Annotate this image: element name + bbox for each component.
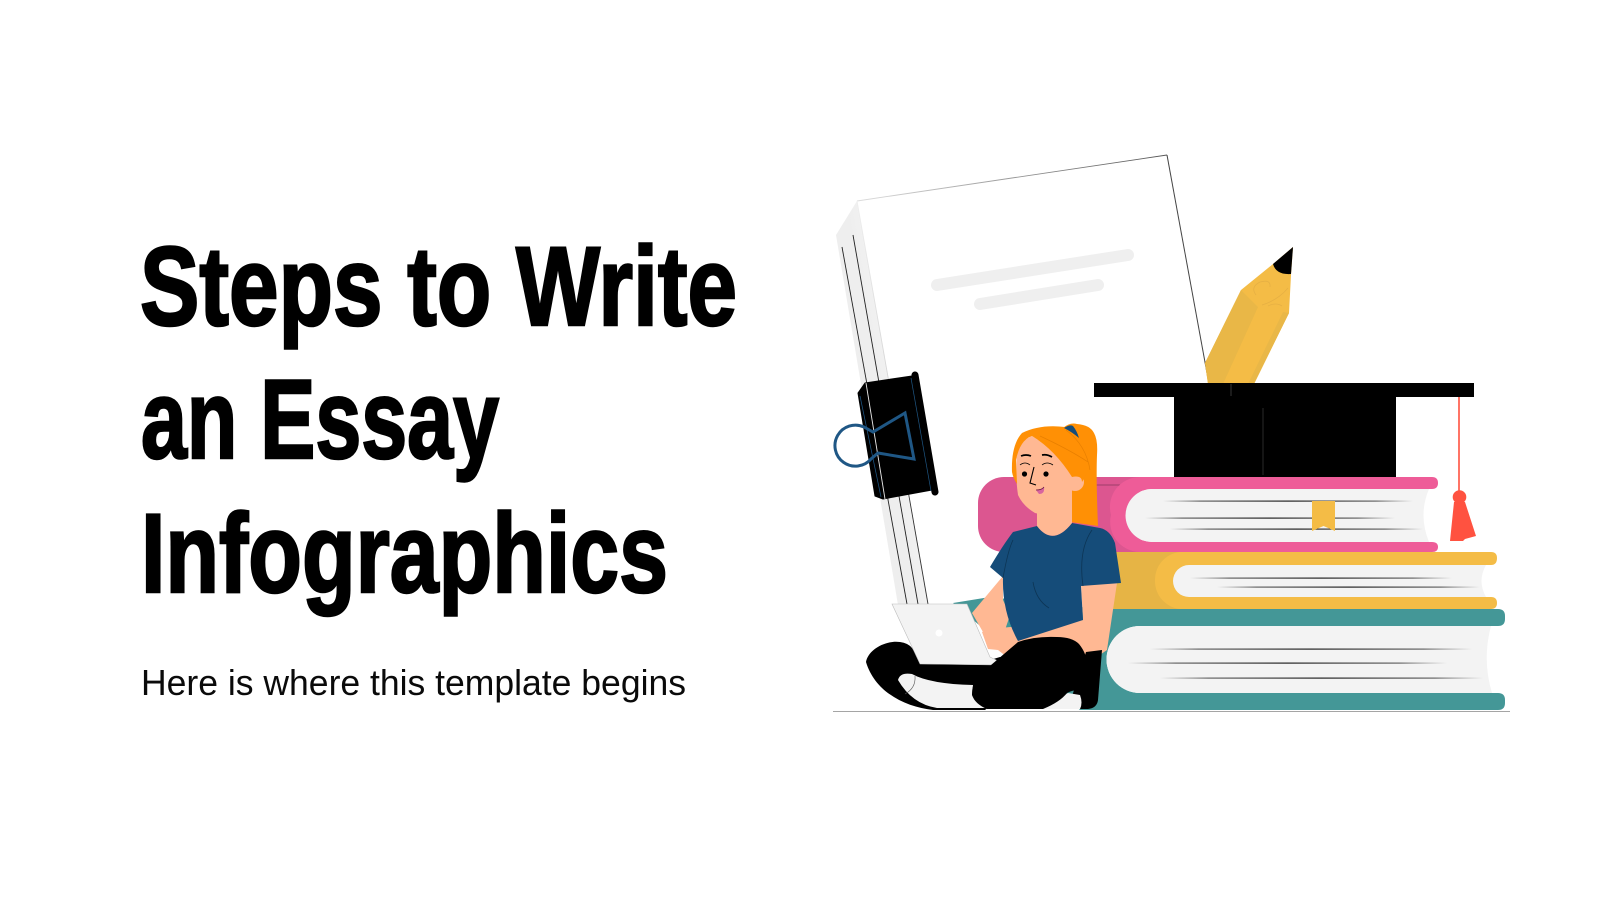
neck (1037, 490, 1072, 536)
left leg (866, 642, 1010, 710)
illustration (833, 155, 1510, 712)
title (140, 224, 737, 616)
ground line (833, 710, 1510, 712)
graduation cap (1094, 383, 1476, 541)
title: an Essay (141, 357, 499, 482)
foot (1040, 693, 1082, 709)
teal book (953, 597, 1505, 710)
back leg (1068, 650, 1102, 709)
hands (982, 629, 1018, 657)
bookmark (1312, 501, 1335, 531)
white sock (898, 674, 985, 708)
title: Infographics (141, 491, 668, 616)
ponytail (1060, 424, 1098, 526)
facial features (1020, 455, 1053, 485)
hair (1012, 426, 1090, 484)
tassel (1450, 397, 1476, 541)
pencil (1205, 247, 1293, 384)
hair band (1064, 425, 1079, 438)
girl with laptop (866, 424, 1121, 710)
essay document (836, 155, 1209, 605)
binder clip (835, 375, 935, 499)
title: Steps to Write (140, 224, 737, 349)
right thigh (972, 637, 1087, 709)
yellow book (1100, 552, 1497, 609)
arms (1000, 583, 1117, 665)
t-shirt (990, 523, 1121, 641)
laptop (892, 604, 1000, 665)
pink book (978, 477, 1438, 552)
book stack (953, 477, 1505, 710)
subtitle: Here is where this template begins (141, 662, 686, 703)
face (1016, 436, 1073, 514)
